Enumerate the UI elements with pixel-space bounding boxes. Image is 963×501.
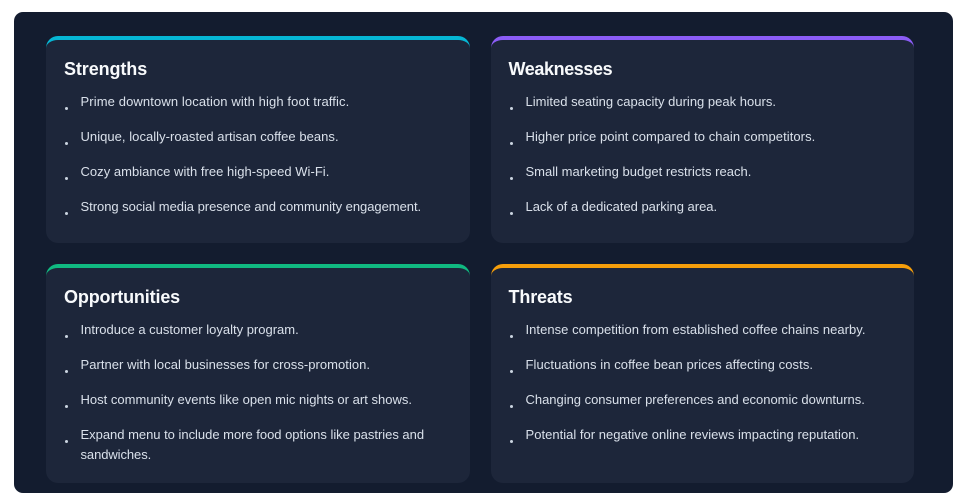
panel: strengths: Prime downtown location with high foot traffic.	[80, 94, 349, 109]
panel: weaknesses: Higher price point compared to chain competitors.	[526, 129, 815, 144]
list: opportunities	[65, 322, 424, 462]
panel: opportunities: Host community events like open mic nights or art shows.	[80, 392, 412, 407]
heading: threats: Threats	[508, 287, 572, 307]
panel: threats: Changing consumer preferences and economic downturns.	[526, 392, 865, 407]
list: weaknesses	[510, 94, 815, 215]
panel: weaknesses: Lack of a dedicated parking area.	[526, 199, 717, 214]
panel: threats	[491, 264, 914, 483]
panel: weaknesses: Small marketing budget restricts reach.	[526, 164, 751, 179]
panel: opportunities: Partner with local businesses for cross-promotion.	[80, 357, 370, 372]
panel: weaknesses: Limited seating capacity during peak hours.	[526, 94, 776, 109]
panel: strengths	[46, 36, 470, 243]
panel: strengths: Cozy ambiance with free high-speed Wi-Fi.	[80, 164, 329, 179]
panel: opportunities: sandwiches.	[80, 447, 151, 462]
list: threats	[510, 322, 866, 443]
panel: opportunities	[46, 264, 470, 483]
panel: strengths: Unique, locally-roasted artisan coffee beans.	[80, 129, 339, 144]
panel: threats: Potential for negative online reviews impacting reputation.	[526, 427, 859, 442]
panel: weaknesses	[491, 36, 914, 243]
heading: opportunities: Opportunities	[64, 287, 180, 307]
panel: threats: Intense competition from established coffee chains nearby.	[526, 322, 866, 337]
heading: strengths: Strengths	[64, 59, 147, 79]
panel: opportunities: Expand menu to include more food options like pastries and	[80, 427, 424, 442]
heading: weaknesses: Weaknesses	[508, 59, 612, 79]
panel: strengths: Strong social media presence and community engagement.	[80, 199, 421, 214]
panel: threats: Fluctuations in coffee bean prices affecting costs.	[526, 357, 813, 372]
panel: opportunities: Introduce a customer loyalty program.	[80, 322, 299, 337]
list: strengths	[65, 94, 421, 215]
